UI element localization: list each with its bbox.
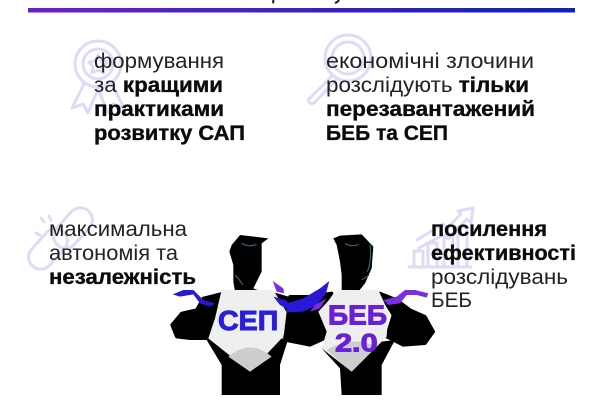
- text: economic crimes: розслідують тільки: [326, 74, 529, 97]
- ribbon: purple right: [273, 281, 284, 293]
- left arm: [172, 293, 223, 338]
- head: [333, 234, 373, 292]
- text: autonomy: [49, 218, 196, 289]
- label: СЕП: СЕП: [218, 305, 278, 336]
- hair highlight: [345, 243, 370, 280]
- figure: hero СЕП: [172, 235, 310, 395]
- panel: autonomy: [24, 203, 196, 289]
- label: 2.0: 2.0: [335, 330, 378, 358]
- text: best practices: формування: [94, 50, 224, 73]
- text: best practices: практиками: [94, 98, 224, 121]
- right arm: [272, 293, 310, 338]
- ribbon: blue right: [273, 297, 310, 312]
- shirt shading: [228, 347, 272, 372]
- torso: [322, 340, 395, 395]
- panel: efficiency: [409, 208, 576, 312]
- left arm: [285, 293, 332, 345]
- ribbon: purple left: [310, 298, 327, 312]
- icon: medal: [72, 41, 124, 113]
- text: autonomy: максимальна: [49, 218, 187, 241]
- torso: [207, 338, 288, 395]
- panel: best practices: [72, 41, 245, 145]
- hair highlight: [235, 243, 257, 285]
- text: efficiency: посилення: [431, 218, 547, 241]
- text: best practices: за кращими: [94, 74, 223, 97]
- text: efficiency: [431, 218, 576, 312]
- text: efficiency: БЕБ: [431, 289, 472, 312]
- text: economic crimes: [326, 50, 535, 145]
- text: economic crimes: економічні злочини: [326, 50, 534, 73]
- figure: hero БЕБ 2.0: [285, 234, 433, 395]
- text: economic crimes: БЕБ та СЕП: [326, 122, 448, 145]
- ribbon: blue left: [287, 281, 329, 312]
- text: efficiency: ефективності: [431, 242, 576, 265]
- shirt shading: [327, 342, 377, 372]
- open shirt: [208, 290, 288, 372]
- text: autonomy: автономія та: [49, 242, 178, 265]
- open shirt: [318, 290, 388, 372]
- ribbon: purple right: [383, 290, 428, 305]
- text: efficiency: розслідувань: [431, 266, 568, 289]
- icon: chain link: [24, 203, 97, 274]
- label: БЕБ: БЕБ: [328, 299, 387, 330]
- icon: magnifier: [308, 35, 371, 104]
- text: economic crimes: перезавантажений: [326, 98, 535, 121]
- right arm: [380, 293, 433, 345]
- ribbon: blue left: [173, 290, 215, 307]
- panel: economic crimes: [308, 35, 535, 145]
- icon: growth chart: [409, 208, 473, 267]
- text: autonomy: незалежність: [49, 266, 196, 289]
- head: [229, 235, 268, 292]
- text: best practices: [94, 50, 245, 145]
- clipped title fragment: [273, 0, 339, 3]
- text: best practices: розвитку САП: [94, 122, 245, 145]
- title underline bar: [28, 8, 575, 12]
